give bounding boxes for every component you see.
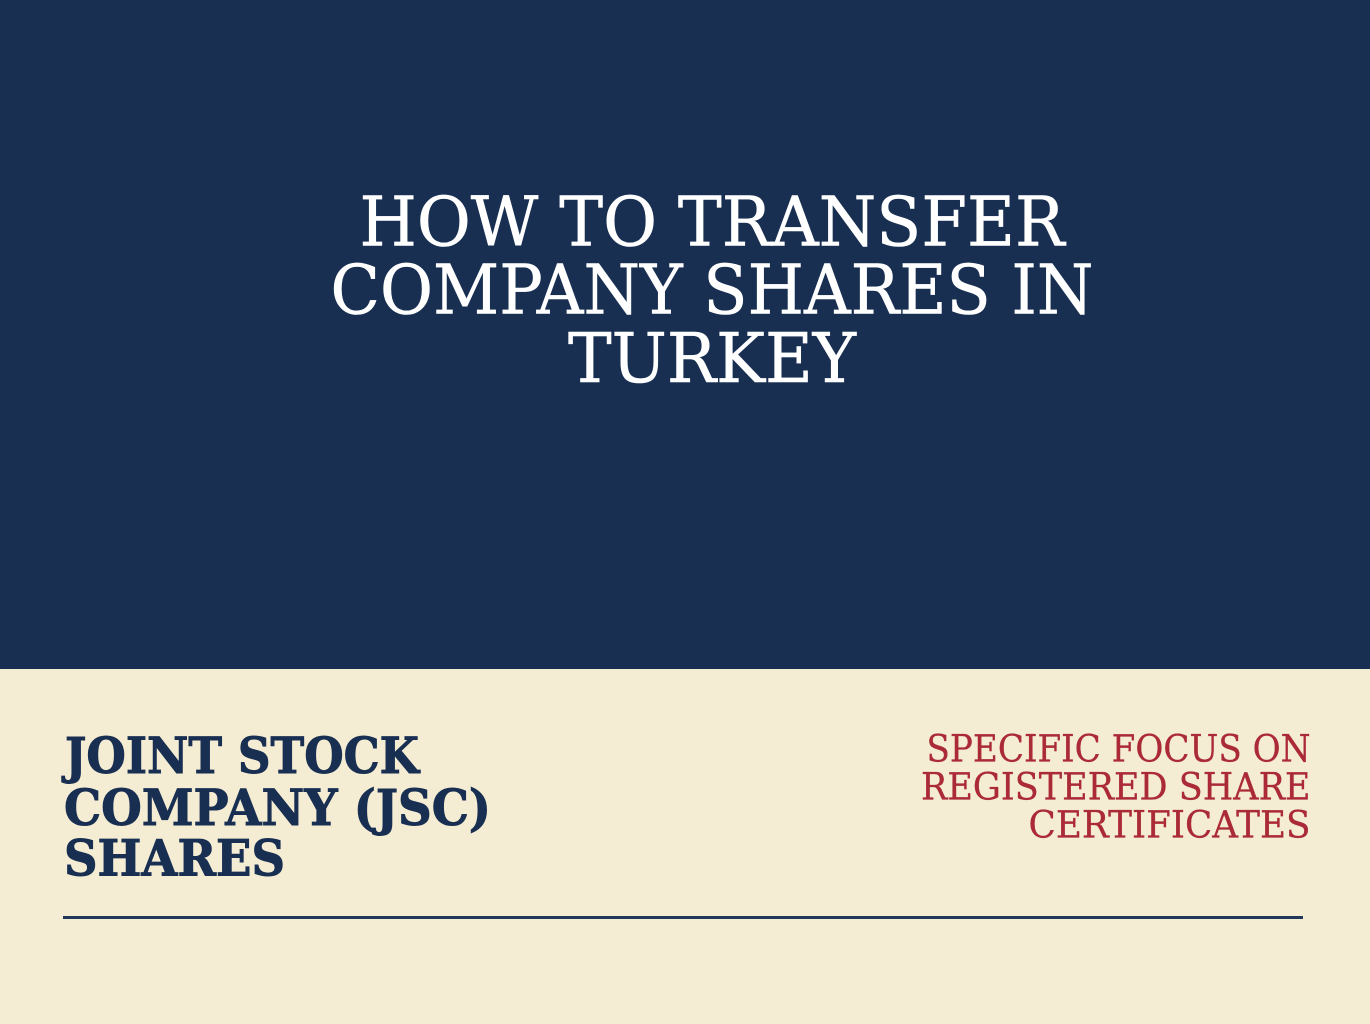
panel: navy header xyxy=(0,0,1370,669)
heading: joint stock company shares: COMPANY (JSC) xyxy=(64,778,491,837)
subheading: registered share certificates: SPECIFIC FOCUS ON xyxy=(926,728,1310,770)
heading: joint stock company shares: JOINT STOCK xyxy=(61,726,420,785)
heading: joint stock company shares: SHARES xyxy=(64,828,285,888)
subheading: registered share certificates xyxy=(921,728,1310,846)
heading: joint stock company shares xyxy=(61,726,491,888)
title xyxy=(330,184,1094,399)
panel: cream footer xyxy=(0,669,1370,1024)
divider line xyxy=(63,916,1303,919)
title: COMPANY SHARES IN xyxy=(330,252,1094,330)
subheading: registered share certificates: REGISTERED SHARE xyxy=(921,766,1310,808)
title: HOW TO TRANSFER xyxy=(360,184,1066,262)
title: TURKEY xyxy=(568,320,857,399)
subheading: registered share certificates: CERTIFICATES xyxy=(1028,804,1310,846)
